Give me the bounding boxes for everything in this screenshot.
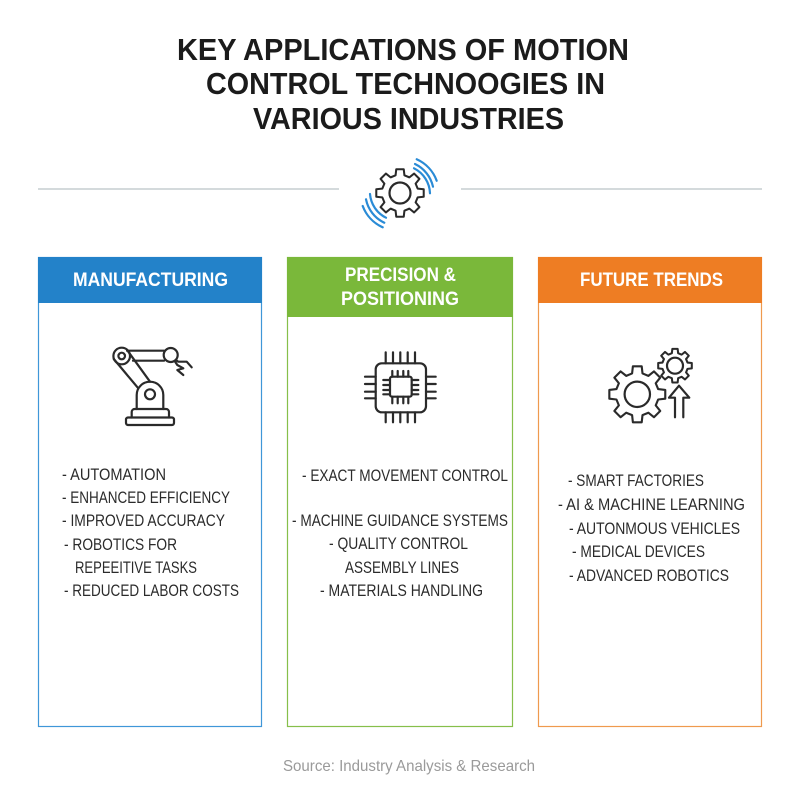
list: manufacturing: - IMPROVED ACCURACY (62, 511, 225, 530)
panel: future trends (538, 257, 762, 726)
panel: manufacturing (38, 257, 262, 726)
list: manufacturing: - AUTOMATION (62, 465, 166, 484)
list: precision and positioning: - EXACT MOVEMENT CONTROL (302, 466, 508, 485)
list: manufacturing: - ENHANCED EFFICIENCY (62, 488, 230, 507)
icon: microchip (365, 352, 436, 422)
title: KEY APPLICATIONS OF MOTION (177, 32, 629, 67)
list: manufacturing: - ROBOTICS FOR (64, 535, 177, 554)
list: precision and positioning (292, 466, 508, 600)
list: future trends: - AI & MACHINE LEARNING (558, 495, 745, 514)
list: manufacturing: REPEEITIVE TASKS (75, 558, 197, 577)
icon: gears and up arrow (609, 349, 692, 422)
heading: precision and positioning (287, 257, 513, 317)
list: manufacturing (62, 465, 239, 600)
title (177, 32, 629, 136)
heading: manufacturing (38, 257, 262, 303)
list: precision and positioning: ASSEMBLY LINES (345, 558, 459, 577)
heading: future trends (538, 257, 762, 303)
title: CONTROL TECHNOOGIES IN (206, 66, 605, 101)
heading: manufacturing: MANUFACTURING (73, 269, 228, 291)
icon: gear with motion waves (363, 159, 437, 227)
list: precision and positioning: - MACHINE GUIDANCE SYSTEMS (292, 511, 508, 530)
heading: precision and positioning: POSITIONING (341, 288, 459, 310)
heading: precision and positioning: PRECISION & (345, 264, 456, 286)
icon: robot arm (113, 348, 192, 425)
list: precision and positioning: - QUALITY CONTROL (329, 534, 468, 553)
list: future trends: - SMART FACTORIES (568, 471, 704, 490)
list: precision and positioning: - MATERIALS HANDLING (320, 581, 483, 600)
source note: Source: Industry Analysis & Research (283, 758, 535, 775)
list: future trends: - AUTONMOUS VEHICLES (569, 519, 740, 538)
title: VARIOUS INDUSTRIES (253, 101, 564, 136)
list: manufacturing: - REDUCED LABOR COSTS (64, 581, 239, 600)
heading: future trends: FUTURE TRENDS (580, 269, 723, 291)
list: future trends (558, 471, 745, 585)
list: future trends: - ADVANCED ROBOTICS (569, 566, 729, 585)
list: future trends: - MEDICAL DEVICES (572, 542, 705, 561)
panel: precision and positioning (287, 257, 513, 726)
